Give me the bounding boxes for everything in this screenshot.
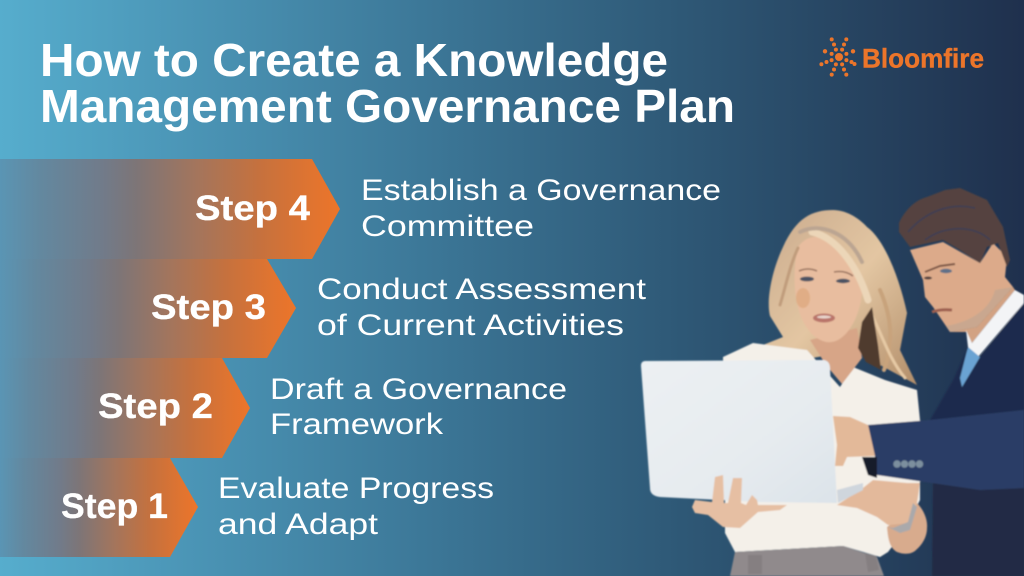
arrow: step 4 [0, 159, 340, 259]
laptop [641, 360, 863, 503]
man hair strands [908, 206, 990, 240]
arrow: step 3 [0, 259, 296, 358]
step 3 row [0, 259, 647, 358]
woman hair back [758, 210, 917, 385]
step 4 text: Committee [361, 210, 534, 243]
man neck [950, 287, 1015, 343]
step 2 label: Step 2 [98, 387, 213, 426]
watch [888, 503, 917, 533]
man collar [966, 290, 1024, 357]
step 3 text [317, 273, 647, 342]
man face [910, 242, 1013, 332]
woman left hand [692, 475, 787, 528]
man pointing hand [833, 416, 875, 466]
step 4 text: Establish a Governance [361, 174, 721, 207]
man jaw shade [946, 287, 1013, 332]
man arm [868, 410, 1024, 490]
step 2 text: Framework [270, 408, 444, 441]
woman shirt [723, 343, 920, 557]
step 4 label: Step 4 [195, 189, 311, 228]
icon: bloom burst [819, 37, 856, 77]
man features [924, 264, 955, 312]
step 4 text [361, 174, 721, 243]
sleeve buttons [893, 460, 923, 468]
man [833, 188, 1024, 576]
woman neck [810, 328, 862, 384]
step 3 text: of Current Activities [317, 309, 624, 342]
logo: Bloomfire [819, 37, 984, 77]
woman dark hair shadow [858, 307, 881, 370]
woman cheek shade [796, 288, 810, 308]
woman hair strands [780, 228, 905, 378]
arrow: step 2 [0, 358, 250, 458]
laptop base [837, 483, 863, 503]
step 2 text: Draft a Governance [270, 373, 567, 406]
woman forearm [887, 503, 927, 554]
step 3 text: Conduct Assessment [317, 273, 647, 306]
step 1 text: and Adapt [218, 508, 379, 541]
man suit [930, 303, 1024, 420]
man tie [960, 347, 980, 387]
woman right hand [837, 480, 920, 525]
title [40, 34, 735, 132]
woman face [795, 237, 862, 342]
man cuff [862, 457, 877, 478]
man body lower [932, 483, 1024, 576]
laptop lid [641, 360, 837, 503]
woman skirt [730, 546, 884, 576]
step 2 row [0, 358, 567, 458]
step 1 text: Evaluate Progress [218, 472, 494, 505]
man hair [899, 188, 1010, 267]
step 3 label: Step 3 [151, 288, 266, 327]
title: Management Governance Plan [40, 80, 735, 132]
step 1 label: Step 1 [61, 487, 168, 526]
step 1 row [0, 458, 494, 557]
title: How to Create a Knowledge [40, 34, 668, 86]
arrow: step 1 [0, 458, 198, 557]
wordmark: Bloomfire [862, 44, 984, 74]
woman eyes and mouth [799, 269, 853, 322]
step 2 text [270, 373, 567, 441]
step 1 text [218, 472, 494, 541]
woman [723, 210, 927, 576]
step 4 row [0, 159, 721, 259]
photo: two colleagues with laptop [641, 188, 1024, 576]
